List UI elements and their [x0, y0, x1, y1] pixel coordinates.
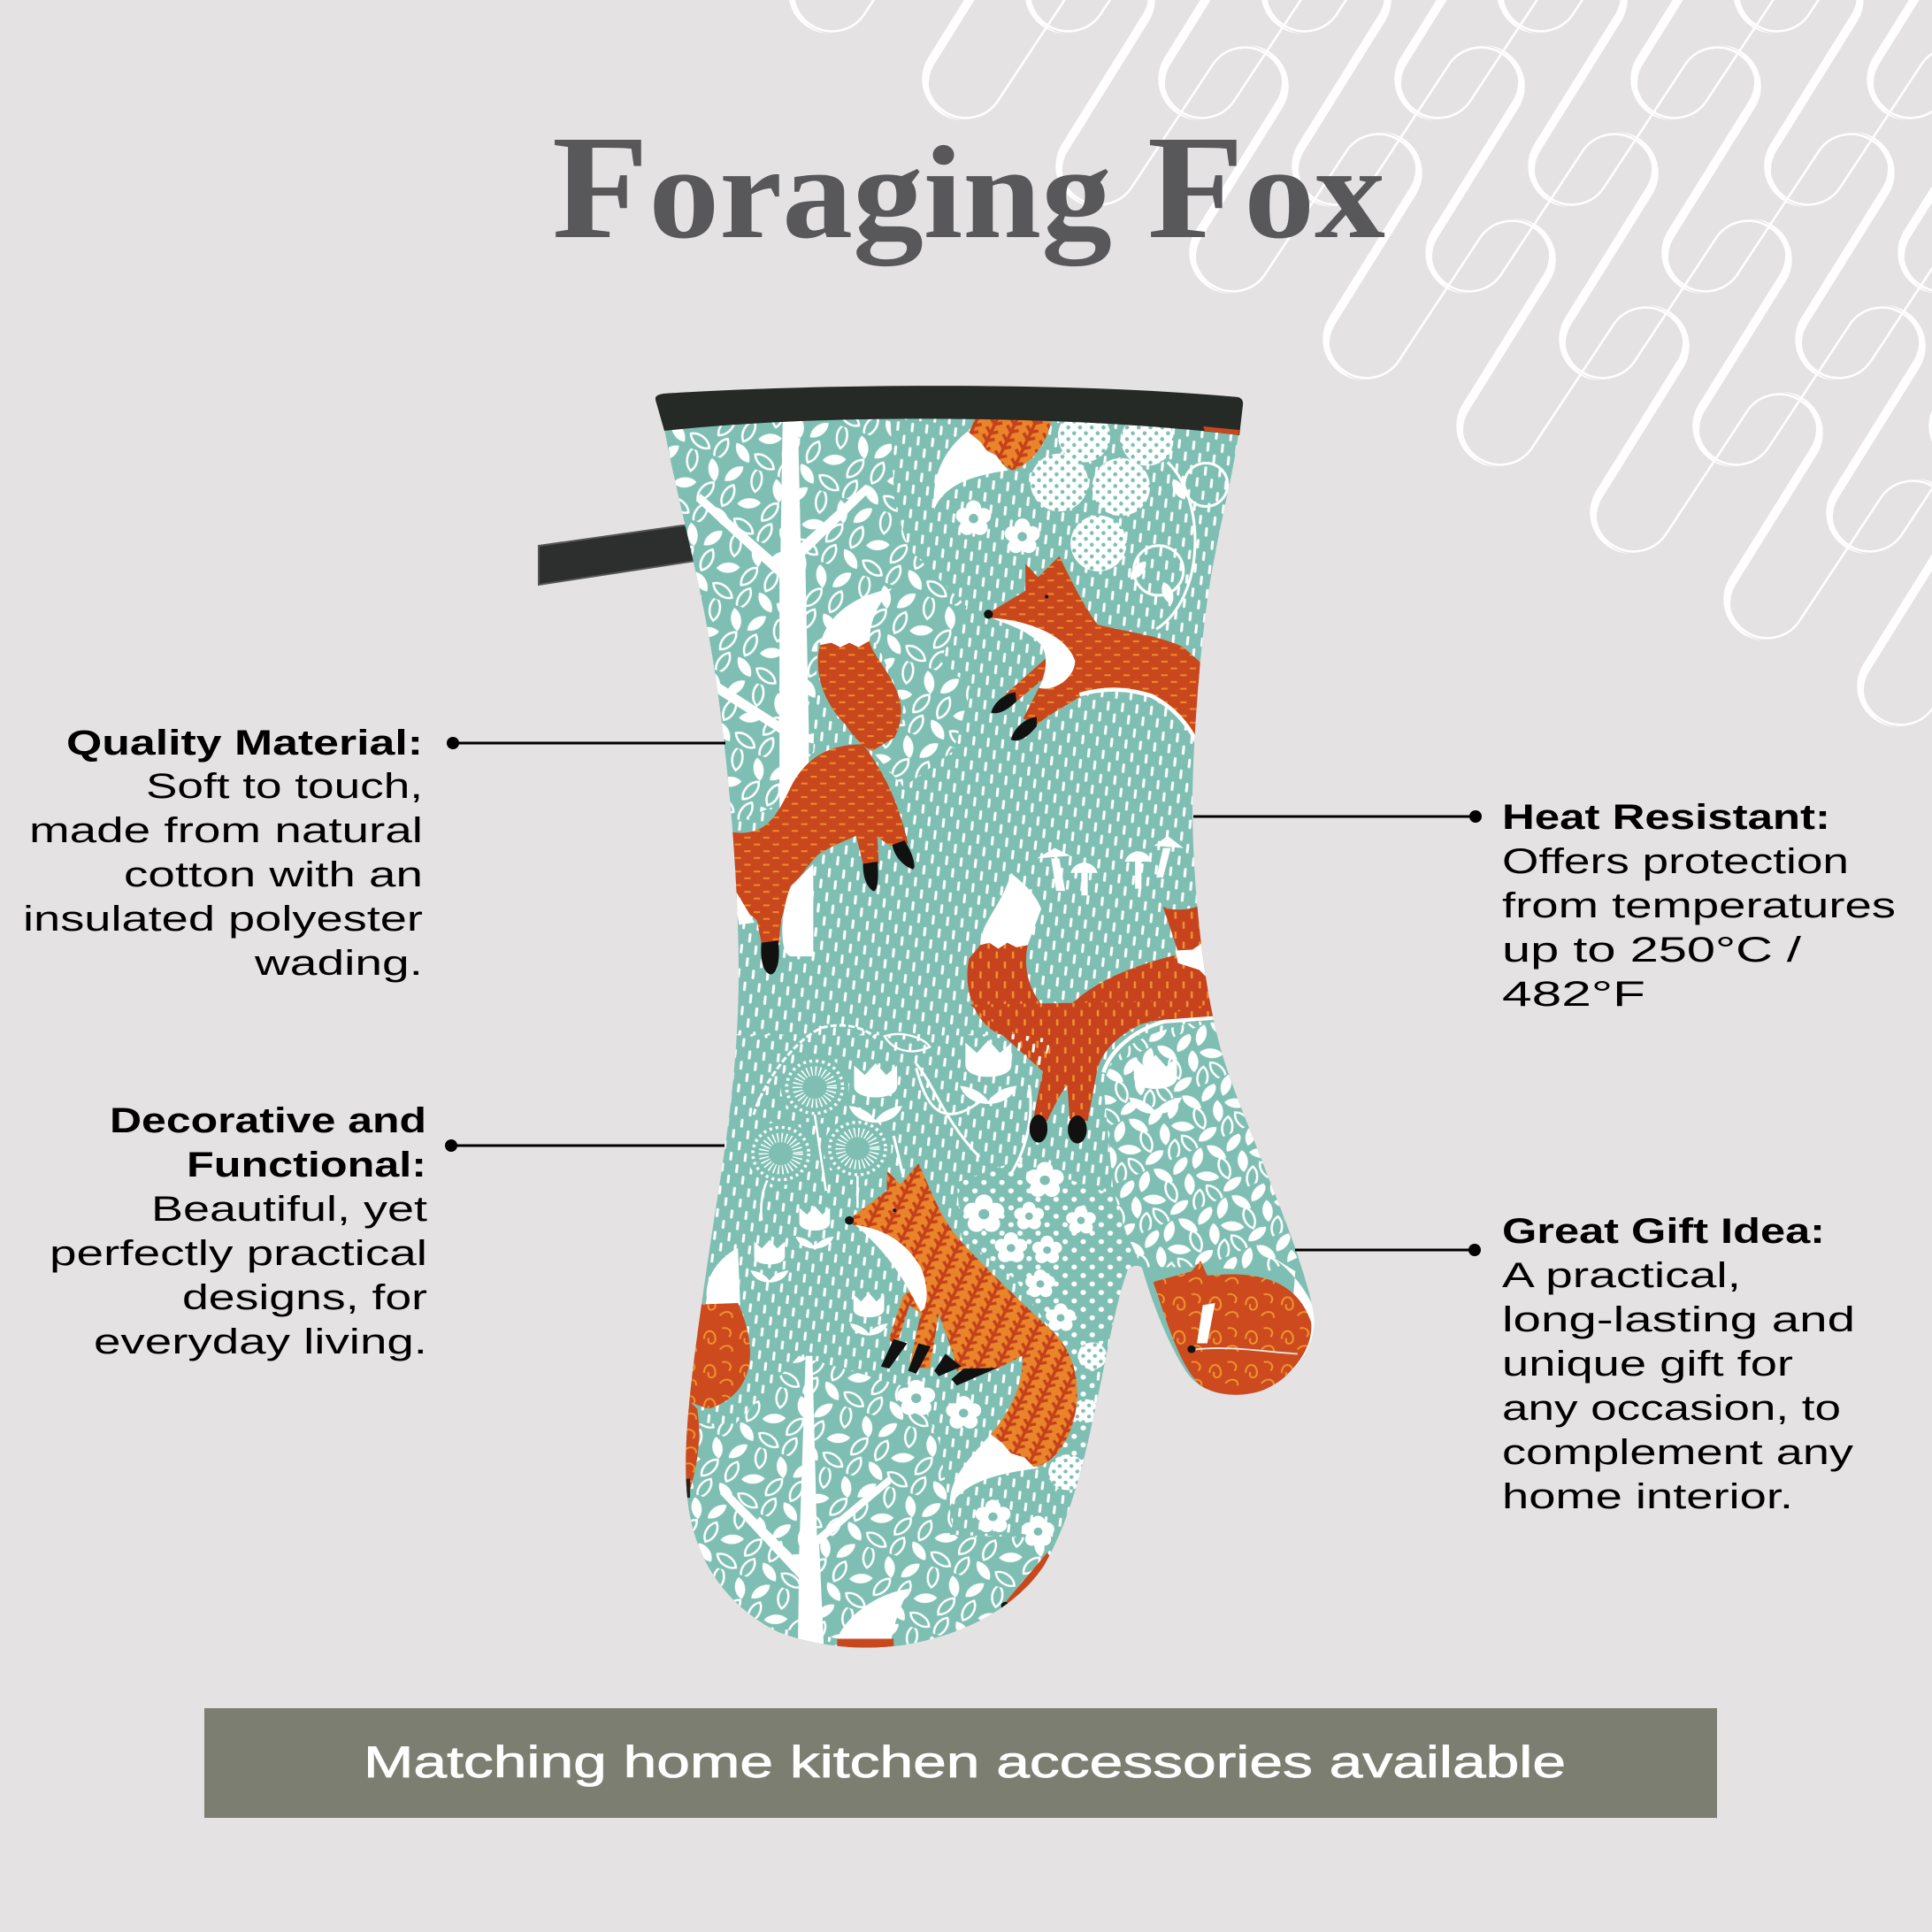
bottom right fox [1004, 1552, 1056, 1610]
prancing fox haunch and legs [970, 1000, 1223, 1121]
callout: Decorative and Functional: designs, for [182, 1278, 427, 1317]
side fox foot [684, 1479, 690, 1498]
callout: Great Gift Idea: complement any [1502, 1433, 1853, 1472]
title: Foraging Fox [552, 105, 1385, 270]
upper tree leaves [664, 412, 971, 824]
leaping fox one white details [734, 864, 813, 956]
sitting fox body [853, 1163, 1077, 1467]
callout: Heat Resistant: 482°F [1502, 975, 1645, 1014]
fox two tail [969, 417, 1052, 471]
callout: Great Gift Idea: any occasion, to [1502, 1389, 1841, 1428]
callout: Quality Material [23, 724, 725, 983]
callout: Heat Resistant: up to 250°C / [1502, 931, 1802, 970]
upper tree trunk and branches [696, 422, 870, 809]
lower tree trunk and branches [720, 1356, 892, 1644]
callout: Decorative and Functional [50, 1101, 724, 1361]
side fox body [677, 1303, 750, 1496]
leaping fox one tail [818, 640, 901, 751]
callout: Decorative and Functional: Decorative and [110, 1101, 426, 1140]
field flowers [897, 1162, 1096, 1545]
oven mitt [539, 386, 1341, 1669]
callout: Decorative and Functional: perfectly practical [50, 1234, 427, 1273]
mitt print [664, 418, 1315, 1647]
callout: Heat Resistant: Heat Resistant: [1502, 798, 1830, 837]
callout: Great Gift Idea: unique gift for [1502, 1345, 1793, 1384]
callout: Great Gift Idea: Great Gift Idea: [1502, 1212, 1825, 1251]
teal fabric [655, 389, 1327, 1663]
callout: Decorative and Functional: Beautiful, yet [151, 1190, 427, 1229]
bottom fox tail base [837, 1638, 893, 1652]
callout: Great Gift Idea: long-lasting and [1502, 1300, 1855, 1339]
jumping fox two body [992, 556, 1204, 755]
lower field dashes [663, 1034, 1115, 1669]
black top band [656, 386, 1243, 435]
banner [204, 1708, 1717, 1818]
tulips [750, 1040, 1182, 1336]
callout: Quality Material: wading. [254, 944, 423, 983]
prancing fox tail tip [980, 873, 1041, 948]
prancing fox body [967, 904, 1229, 1076]
sleeping fox details [1187, 1303, 1298, 1353]
right foliage leaves [1103, 1017, 1304, 1271]
callout: Quality Material: made from natural [29, 811, 423, 850]
dotted white patches [1048, 1342, 1107, 1490]
sleeping fox on thumb [1154, 1261, 1311, 1395]
banner: Matching home kitchen accessories available [364, 1737, 1566, 1787]
right foliage [1103, 1017, 1304, 1271]
lower tree leaves [681, 1356, 953, 1652]
fox two white tail tip [933, 432, 1008, 510]
bottom fox tail tip [837, 1589, 909, 1639]
callout: Great Gift Idea [1295, 1212, 1855, 1516]
leaping fox one feet [761, 840, 915, 975]
callout: Heat Resistant: from temperatures [1502, 886, 1896, 925]
callout: Heat Resistant [1193, 798, 1896, 1014]
mushrooms [1037, 836, 1184, 895]
dotted flower patch [957, 1162, 1138, 1496]
lower right leaves [898, 1534, 1047, 1644]
callout: Quality Material: cotton with an [124, 855, 423, 894]
bottom right fox nose [1001, 1602, 1009, 1609]
upper print in zoomed coordinates [665, 418, 1237, 1072]
dotted round flowers [1031, 410, 1174, 571]
jumping fox two nose and feet [984, 594, 1048, 740]
jumping fox two belly ridge [1079, 687, 1195, 743]
jumping fox two chest [992, 617, 1075, 689]
sitting fox chest [855, 1224, 927, 1312]
sitting fox nose and feet [845, 1208, 998, 1385]
hanging loop [539, 525, 695, 585]
grass dashes [665, 418, 1237, 1035]
prancing fox white face [1175, 943, 1206, 977]
small flowers [956, 501, 1040, 553]
callout: Great Gift Idea: A practical, [1502, 1256, 1741, 1295]
callout: Quality Material: Soft to touch, [146, 767, 423, 806]
leaping fox one body [732, 744, 908, 943]
callout: Decorative and Functional: everyday living. [94, 1322, 427, 1361]
lower right foliage background [898, 1534, 1047, 1644]
callout: Heat Resistant: Offers protection [1502, 842, 1849, 881]
upper tree foliage [664, 412, 971, 824]
lower tree foliage background [681, 1356, 953, 1652]
side fox tail tip [707, 1248, 740, 1305]
sitting fox tail tip [950, 1434, 1039, 1506]
lower print in zoomed coordinates [663, 1000, 1318, 1669]
decorative white chain pattern [660, 0, 1932, 814]
scroll vine [1127, 462, 1228, 629]
callout: Quality Material: Quality Material: [66, 724, 423, 763]
dandelions and stems [753, 1025, 1031, 1221]
dotted flower patch background [957, 1162, 1138, 1496]
callout: Decorative and Functional: Functional: [187, 1146, 426, 1184]
red sliver under band [1203, 426, 1239, 435]
thumb white edge [1269, 1254, 1318, 1382]
clearings around dandelions [747, 1055, 892, 1185]
prancing fox belly ridge [1103, 1017, 1223, 1072]
callout: Quality Material: insulated polyester [23, 900, 423, 939]
leaping fox one tail tip [820, 588, 893, 648]
prancing fox feet [1030, 1115, 1087, 1144]
callout: Great Gift Idea: home interior. [1502, 1477, 1793, 1516]
